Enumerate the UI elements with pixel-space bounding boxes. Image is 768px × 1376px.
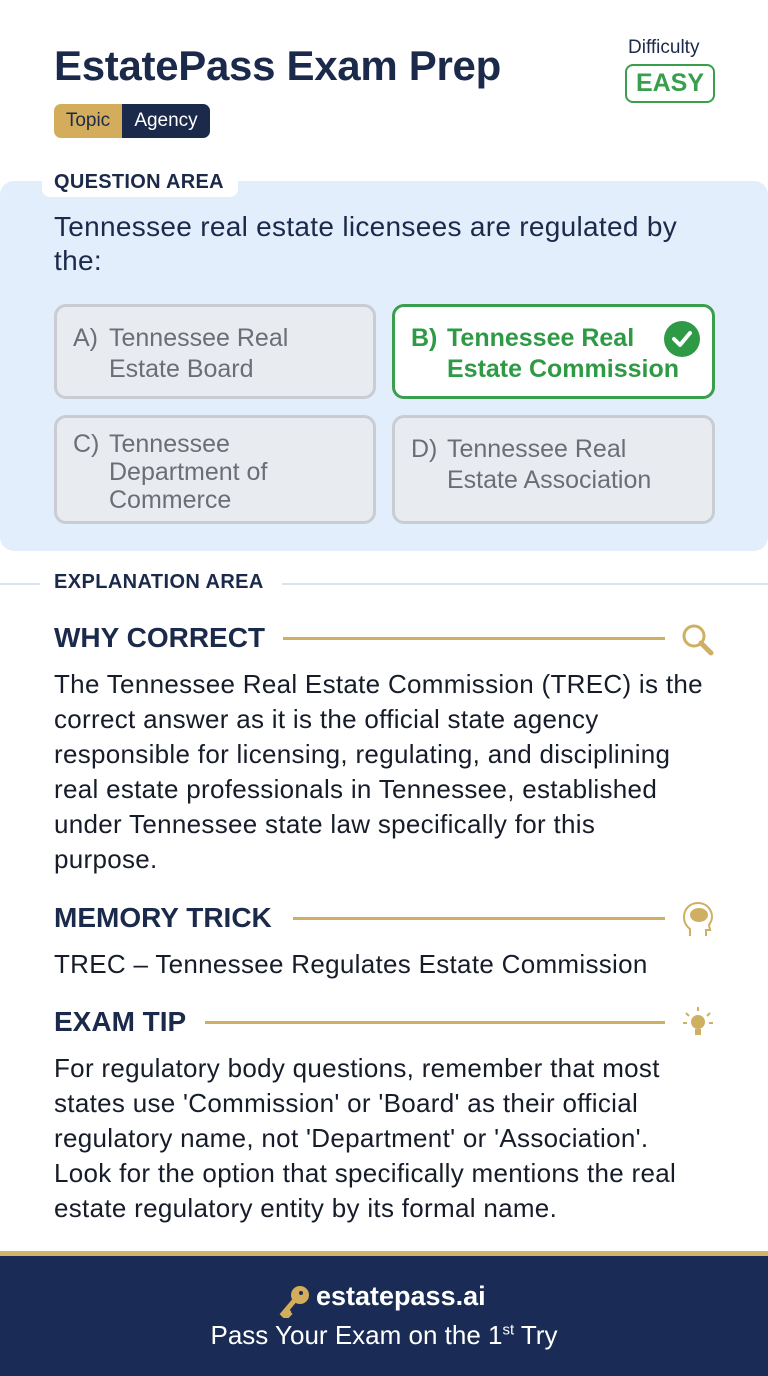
option D: Tennessee Real	[447, 435, 626, 463]
footer	[0, 1251, 768, 1376]
option D	[392, 415, 715, 524]
question area label: QUESTION AREA	[54, 171, 224, 193]
text: why correct: under Tennessee state law specifically for this	[54, 809, 595, 839]
explanation label: EXPLANATION AREA	[54, 571, 264, 593]
option A: A)	[73, 324, 98, 352]
option B correct: B)	[411, 324, 437, 352]
tagline: Pass Your Exam on the 1st Try	[210, 1320, 557, 1350]
option B correct: Estate Commission	[447, 355, 679, 383]
topic pill: Topic	[66, 110, 110, 131]
option C: Tennessee	[109, 430, 230, 458]
option C: Department of	[109, 458, 267, 486]
icon: key	[280, 1286, 309, 1318]
option A: Tennessee Real	[109, 324, 288, 352]
text: why correct: correct answer as it is the official state agency	[54, 704, 599, 734]
icon: head brain	[683, 902, 713, 936]
panel: question area	[0, 181, 768, 551]
text: memory trick: TREC – Tennessee Regulates Estate Commission	[54, 949, 648, 979]
question text: the:	[54, 245, 102, 276]
text: exam tip: Look for the option that specifically mentions the real	[54, 1158, 676, 1188]
option C: Commerce	[109, 486, 231, 514]
option B correct: Tennessee Real	[447, 324, 634, 352]
question area label	[42, 167, 238, 197]
text: exam tip: states use 'Commission' or 'Board' as their official	[54, 1088, 638, 1118]
option D: D)	[411, 435, 437, 463]
text: exam tip: estate regulatory entity by its formal name.	[54, 1193, 557, 1223]
option D: Estate Association	[447, 466, 651, 494]
text: exam tip: regulatory name, not 'Department' or 'Association'.	[54, 1123, 648, 1153]
difficulty badge	[625, 64, 715, 103]
topic pill: Agency	[134, 110, 198, 131]
icon: magnifier	[682, 624, 714, 656]
text: why correct: responsible for licensing, regulating, and disciplining	[54, 739, 670, 769]
heading: memory trick: MEMORY TRICK	[54, 902, 272, 933]
text: why correct: real estate professionals in Tennessee, established	[54, 774, 657, 804]
option A: Estate Board	[109, 355, 254, 383]
text: exam tip: For regulatory body questions, remember that most	[54, 1053, 660, 1083]
text: why correct: purpose.	[54, 844, 158, 874]
heading: why correct: WHY CORRECT	[54, 622, 265, 653]
icon: check	[664, 321, 700, 357]
option C	[54, 415, 376, 524]
difficulty badge: EASY	[636, 69, 704, 97]
text: why correct	[54, 669, 703, 874]
brand: estatepass.ai	[316, 1281, 486, 1311]
question text: Tennessee real estate licensees are regulated by	[54, 211, 677, 242]
heading: exam tip: EXAM TIP	[54, 1006, 186, 1037]
option C: C)	[73, 430, 99, 458]
option B correct	[392, 304, 715, 399]
text: exam tip	[54, 1053, 676, 1223]
topic pill	[54, 104, 210, 138]
question text	[54, 211, 677, 276]
difficulty label: Difficulty	[628, 37, 699, 58]
title: EstatePass Exam Prep	[54, 42, 501, 89]
text: why correct: The Tennessee Real Estate Commission (TREC) is the	[54, 669, 703, 699]
option A	[54, 304, 376, 399]
icon: lightbulb	[683, 1007, 713, 1035]
